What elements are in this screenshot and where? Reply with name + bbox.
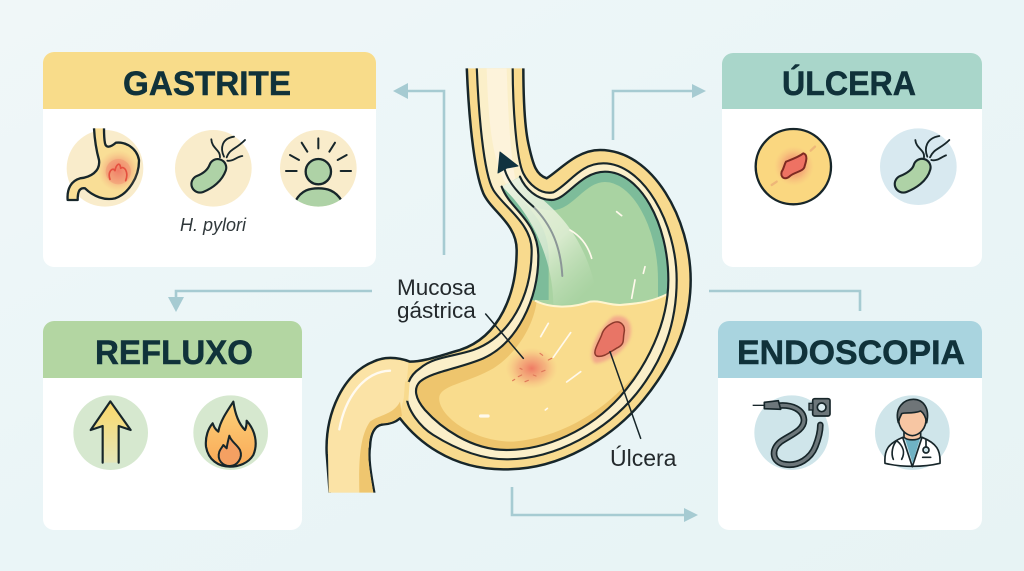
Gastrite icons xyxy=(67,128,357,210)
icon: flame xyxy=(193,395,268,470)
stomach middle wall and oesophagus channel xyxy=(407,65,677,459)
Refluxo header band xyxy=(43,321,302,378)
icon: doctor xyxy=(875,395,950,470)
arrow: stomach to Gastrite xyxy=(393,83,444,255)
arrow: stomach to Refluxo xyxy=(168,291,372,312)
arrow: stomach towards lower right xyxy=(512,487,698,522)
Refluxo icons xyxy=(73,395,268,470)
duodenum light fill xyxy=(328,360,408,493)
infographic canvas xyxy=(43,52,982,530)
oesophagus highlight xyxy=(487,68,517,185)
panel: Úlcera xyxy=(722,53,982,267)
central stomach diagram xyxy=(327,65,691,497)
panel: Refluxo xyxy=(43,321,302,530)
arrow: stomach to Úlcera xyxy=(613,84,706,140)
heading: Refluxo: REFLUXO xyxy=(95,334,253,372)
connector: stomach to Endoscopia xyxy=(709,291,860,311)
heading: Gastrite: GASTRITE xyxy=(123,65,291,103)
gastric ulcer xyxy=(592,316,631,363)
panel: Gastrite xyxy=(43,52,376,267)
icon: person with pain rays xyxy=(280,130,357,210)
Endoscopia icons xyxy=(753,395,950,470)
pyloric gap in wall line xyxy=(406,382,407,401)
Gastrite header band xyxy=(43,52,376,109)
reflux arrow xyxy=(498,152,562,276)
stomach lumen xyxy=(417,172,668,449)
icon: endoscope xyxy=(753,395,830,470)
label: H. pylori: H. pylori xyxy=(180,215,247,235)
label: Úlcera: Úlcera xyxy=(610,445,677,471)
label: Mucosa gástrica: Mucosa xyxy=(397,275,476,300)
heading: Úlcera: ÚLCERA xyxy=(782,65,916,103)
Úlcera icons xyxy=(756,128,957,205)
label: Mucosa gástrica xyxy=(397,275,476,323)
lumen outline xyxy=(416,172,668,450)
Endoscopia header band xyxy=(718,321,982,378)
stomach outer wall xyxy=(327,65,691,497)
inflamed mucosa spot xyxy=(506,348,558,389)
label: Mucosa gástrica: gástrica xyxy=(397,298,476,323)
leader line: ulcer xyxy=(610,352,641,438)
icon: upward arrow xyxy=(73,395,148,470)
icon: H. pylori bacterium xyxy=(175,130,252,207)
icon: inflamed stomach xyxy=(67,128,143,207)
panel: Endoscopia xyxy=(718,321,982,530)
duodenum shading xyxy=(359,402,402,493)
heading: Endoscopia: ENDOSCOPIA xyxy=(737,334,965,372)
icon: ulcer close-up xyxy=(756,129,831,204)
Úlcera header band xyxy=(722,53,982,109)
leader line: mucosa xyxy=(486,314,523,358)
icon: bacterium xyxy=(880,128,957,205)
